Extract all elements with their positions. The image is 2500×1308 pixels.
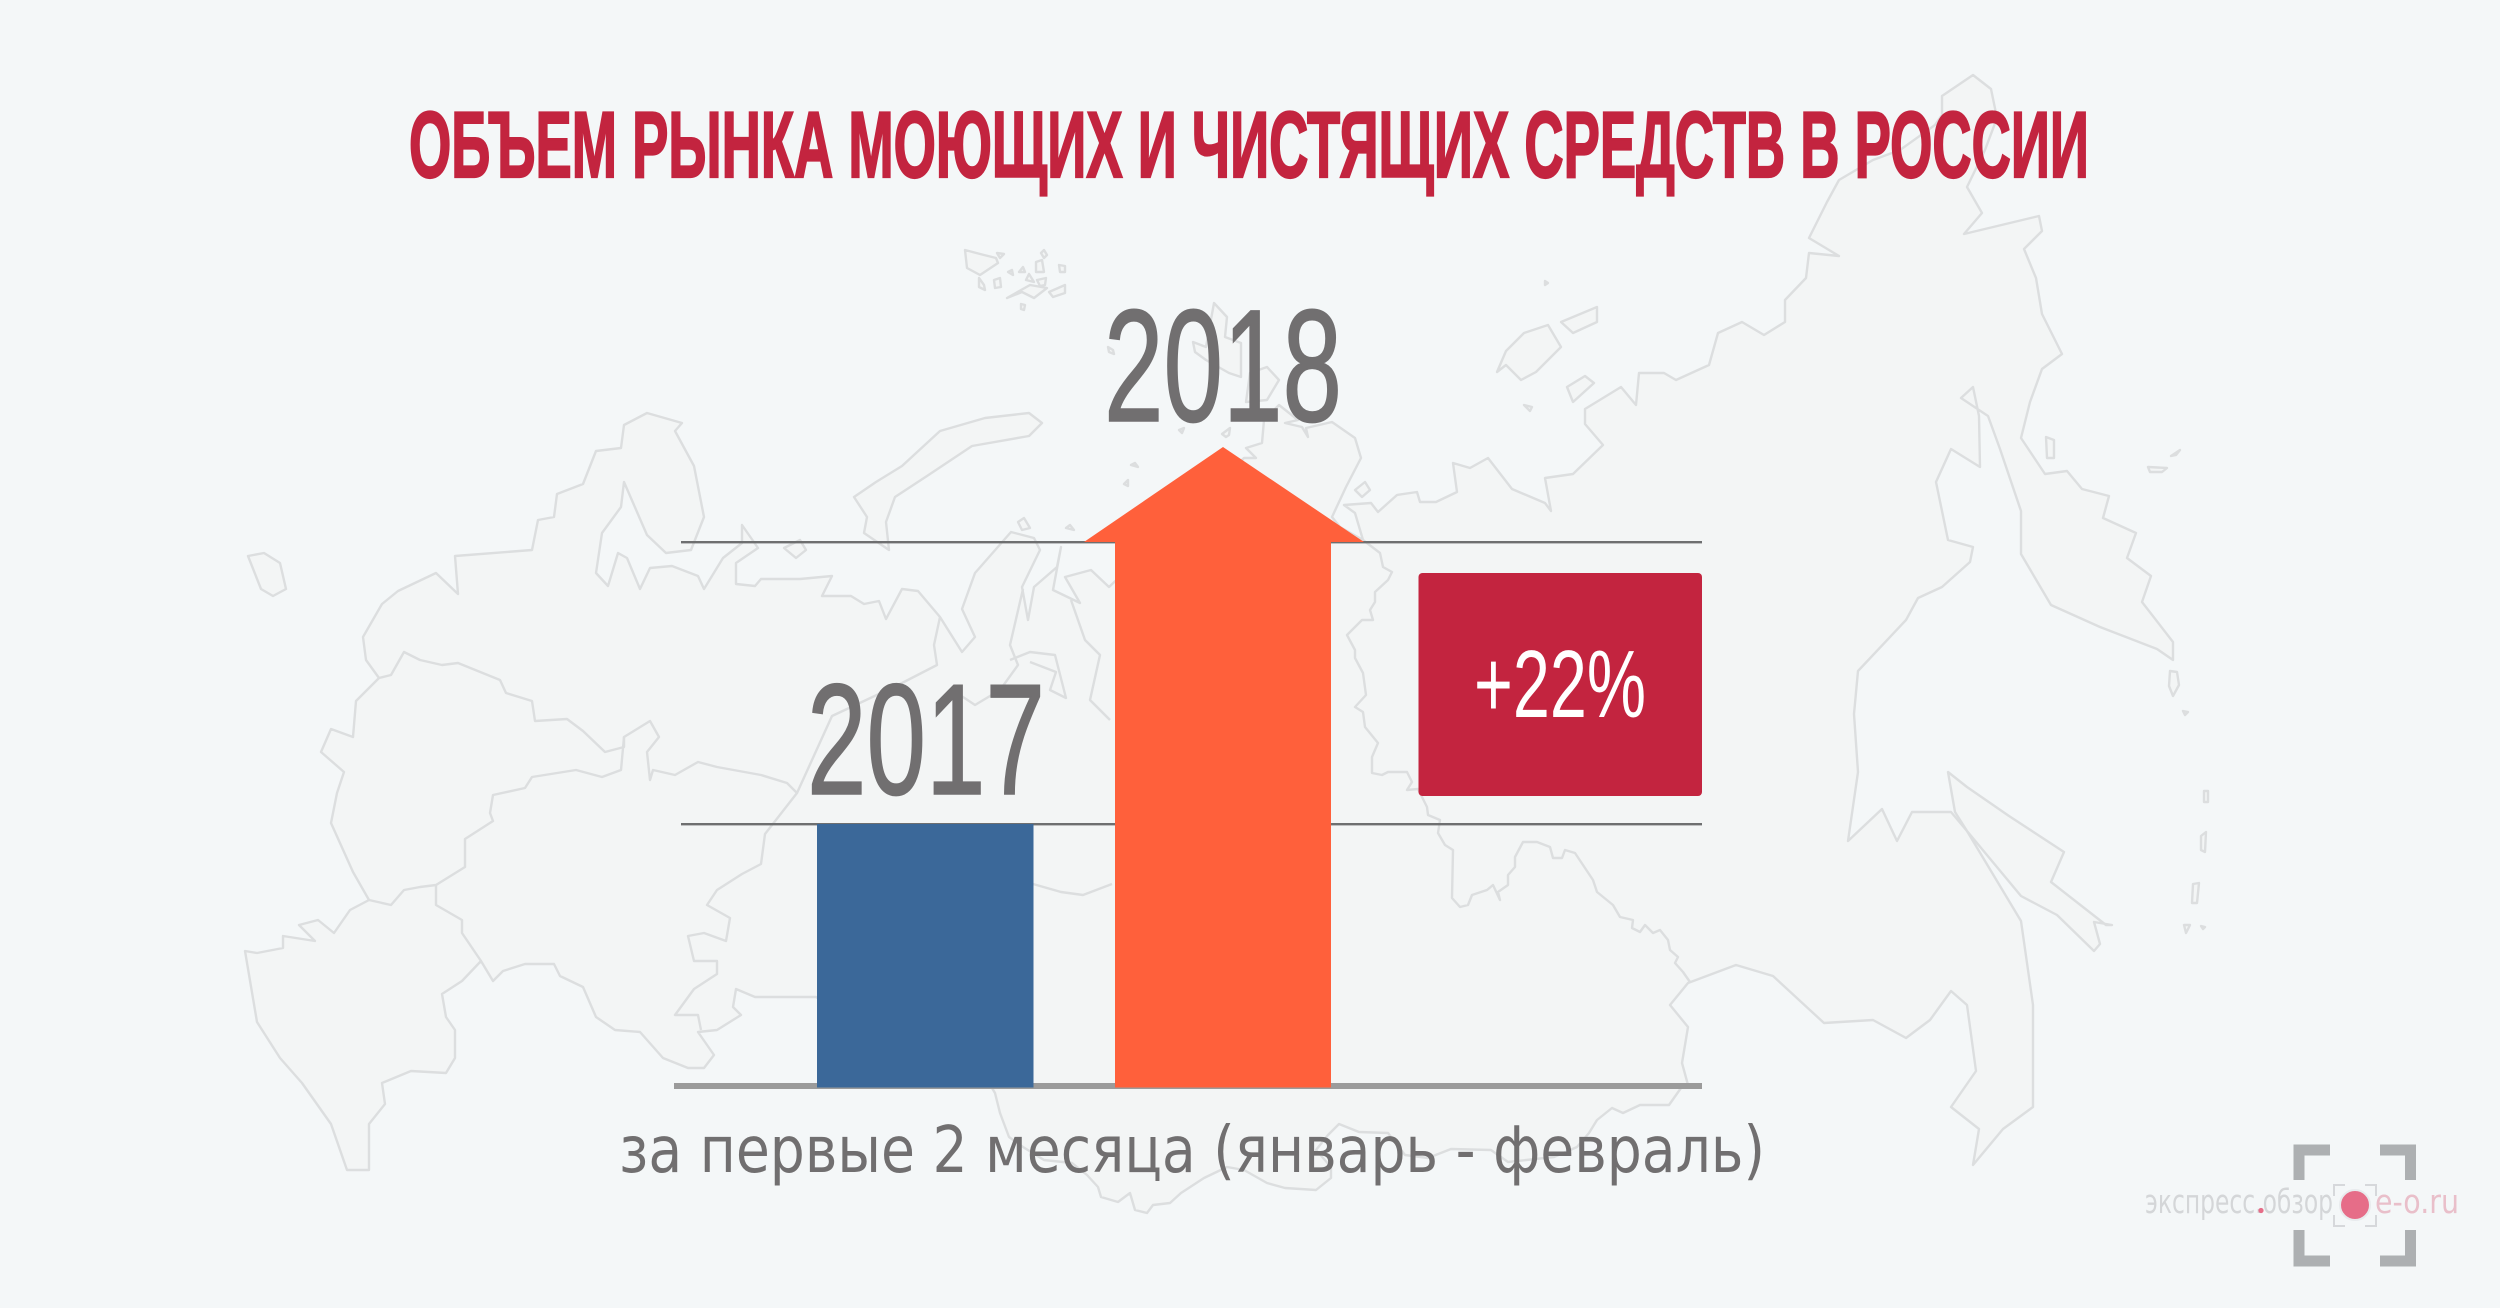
chart: market growth 2017 to 2018 — [674, 276, 1702, 1089]
logo name: экспресс.обзор — [2145, 1182, 2333, 1221]
icon: small viewfinder — [2334, 1185, 2376, 1226]
year label: 2018: 2018 — [1104, 276, 1342, 455]
reference line: 2017 level — [681, 823, 1702, 825]
bar: 2017 — [817, 824, 1034, 1088]
callout: growth percentage: +22% — [1474, 631, 1646, 738]
background map of Russia — [245, 75, 2208, 1213]
reference line: 2018 level — [681, 541, 1702, 543]
icon: pink circle — [2340, 1190, 2370, 1220]
arrow bar: 2018 — [1084, 447, 1364, 1088]
logo: express-obzor watermark — [2145, 1144, 2459, 1266]
icon: pink dot in name — [2258, 1208, 2264, 1213]
baseline axis — [674, 1083, 1702, 1089]
period caption: за первые 2 месяца (январь - февраль) — [619, 1114, 1765, 1188]
icon: viewfinder corners — [2294, 1144, 2416, 1266]
logo domain: e-o.ru — [2375, 1182, 2459, 1221]
year label: 2017: 2017 — [807, 652, 1045, 828]
callout: growth percentage — [1418, 573, 1702, 796]
